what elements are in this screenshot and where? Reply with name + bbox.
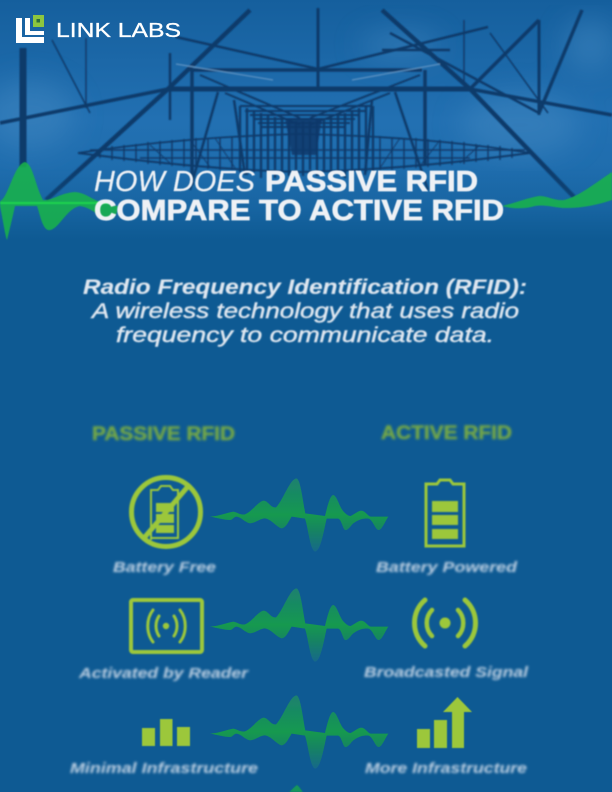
column heading: active RFID: ACTIVE RFID xyxy=(381,423,512,444)
label: minimal infrastructure: Minimal Infrastructure xyxy=(70,760,258,777)
bottom fade of photo xyxy=(0,165,612,240)
tower structure xyxy=(0,8,612,200)
title: HOW DOES xyxy=(94,166,256,198)
icon: more infrastructure bars with arrow xyxy=(417,697,472,748)
definition text block: Radio Frequency Identification (RFID): xyxy=(83,276,527,299)
label: battery free: Battery Free xyxy=(113,559,216,576)
clouds xyxy=(0,19,612,157)
right green signal wave behind title xyxy=(502,172,612,208)
signal wave: row 3 xyxy=(210,695,388,769)
hero photo: transmission tower against a cloudy sky xyxy=(0,0,612,240)
logo: Link Labs xyxy=(16,15,181,43)
label: battery powered: Battery Powered xyxy=(376,559,518,576)
left green signal wave behind title xyxy=(0,162,118,240)
logo mark xyxy=(16,15,44,43)
column heading: passive RFID: PASSIVE RFID xyxy=(92,424,235,445)
main beams xyxy=(168,86,470,92)
lower lens truss xyxy=(78,134,530,153)
icon: minimal infrastructure bars xyxy=(142,719,190,746)
converging rungs xyxy=(240,106,372,127)
label: more infrastructure: More Infrastructure xyxy=(365,760,527,777)
central dark mass xyxy=(285,118,322,155)
inner verticals xyxy=(192,70,425,185)
definition text block: frequency to communicate data. xyxy=(116,324,494,347)
definition text block xyxy=(83,276,527,347)
logo wordmark: LINK LABS xyxy=(56,20,181,42)
dense perspective verticals xyxy=(240,106,373,178)
signal wave: row 2 xyxy=(210,588,388,662)
outer diagonals xyxy=(46,10,250,200)
label: activated by reader: Activated by Reader xyxy=(78,665,249,682)
icon: battery powered xyxy=(426,480,464,546)
definition text block: A wireless technology that uses radio xyxy=(90,300,519,323)
icon: activated by reader xyxy=(131,600,202,652)
label: broadcasted signal: Broadcasted Signal xyxy=(364,664,529,681)
title: COMPARE TO ACTIVE RFID xyxy=(94,195,504,227)
title xyxy=(94,166,504,227)
signal wave: row 4, cropped at page edge xyxy=(289,785,303,792)
title: PASSIVE RFID xyxy=(265,166,478,198)
icon: battery free xyxy=(132,478,200,546)
icon: broadcasted signal xyxy=(414,600,476,646)
signal wave: row 1 xyxy=(210,478,388,552)
